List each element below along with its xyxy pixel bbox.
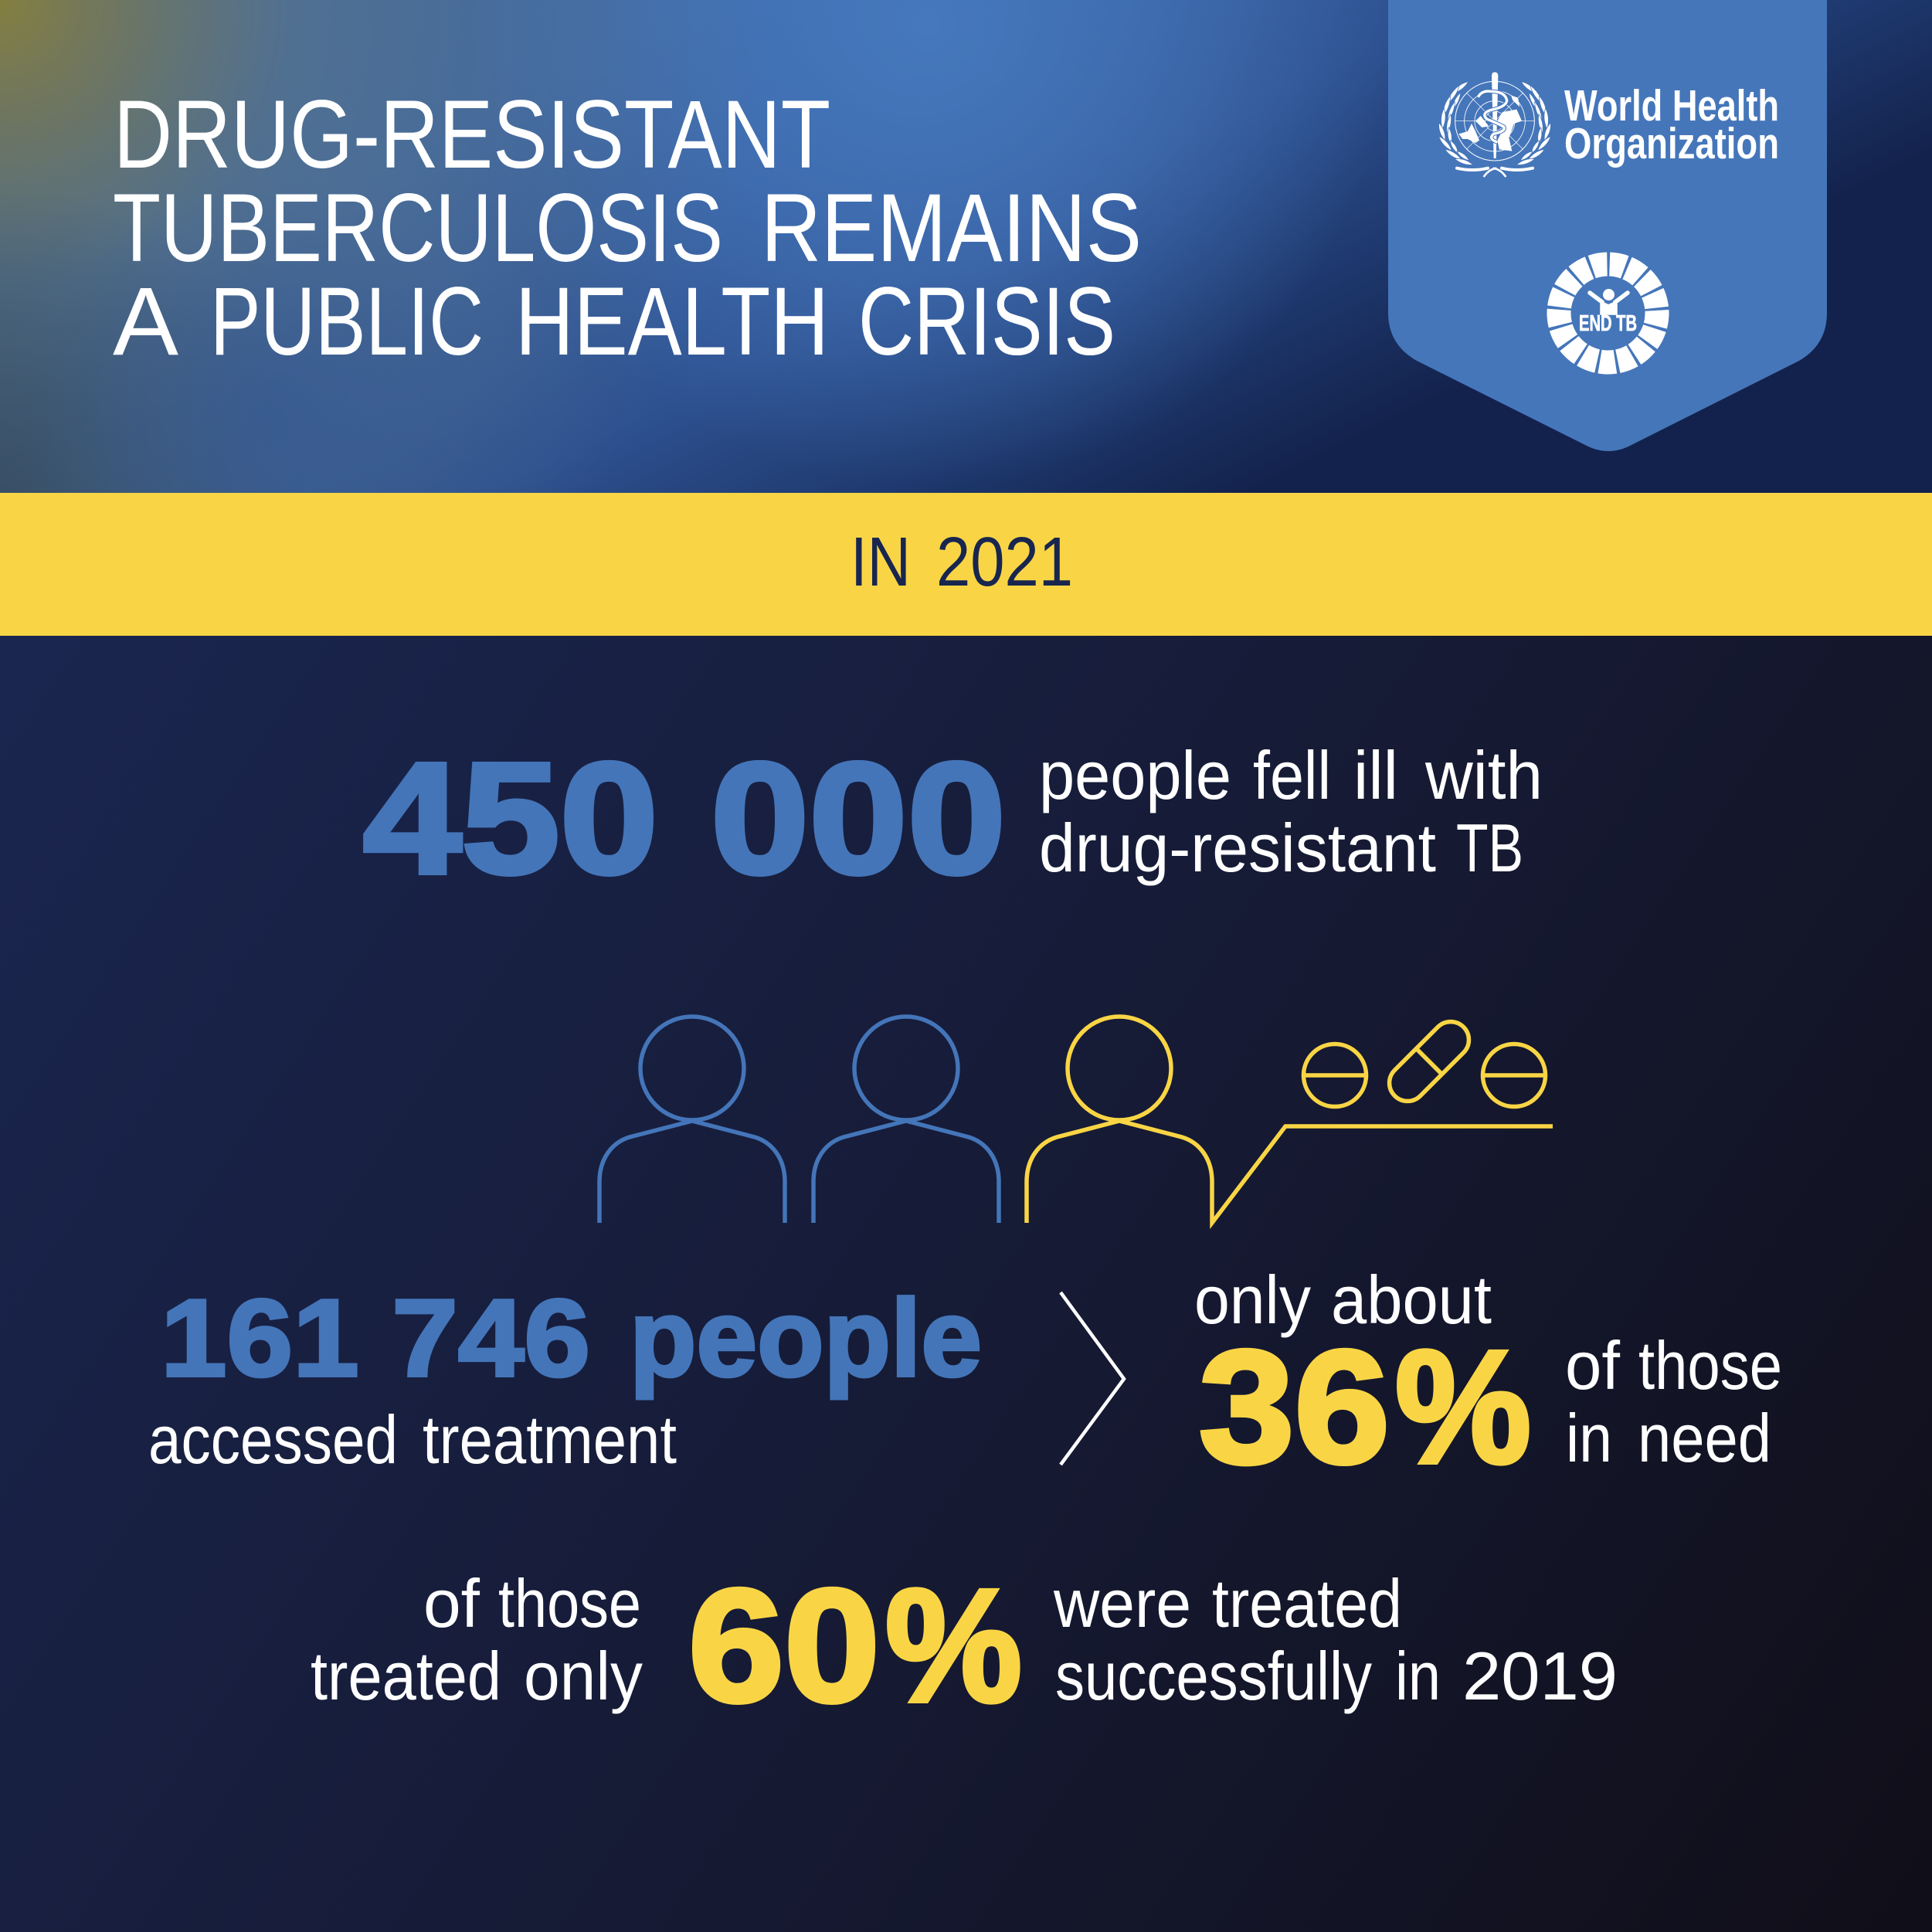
- icon: WHO emblem: [1439, 72, 1550, 177]
- stat: only about 36% of those in need: %: [1395, 1318, 1531, 1497]
- stat: 450 000 people fell ill: 450: [363, 730, 658, 907]
- main background: [0, 635, 1932, 1932]
- stat: of those treated only 60% were treated successfully in 2019: successfully: [1055, 1638, 1372, 1714]
- title: A: [113, 268, 179, 375]
- icon: End TB logo: [1557, 263, 1659, 364]
- stat: 161 746 people accessed treatment: [148, 1277, 982, 1478]
- stat: 450 000 people fell ill: 000: [711, 730, 1006, 907]
- header gradient background: [0, 0, 1932, 494]
- band heading: in 2021: 2021: [936, 524, 1073, 601]
- stat: of those treated only 60% were treated successfully in 2019: were: [1053, 1565, 1191, 1642]
- stat: 450 000 people fell ill: [363, 730, 1543, 907]
- stat: of those treated only 60% were treated successfully in 2019: 2019: [1462, 1638, 1618, 1714]
- icon: End TB logo: END TB: [1579, 311, 1637, 336]
- icon: blue person 1: [599, 1017, 785, 1223]
- stat: 450 000 people fell ill: drug-resistant: [1039, 810, 1436, 886]
- stat: 161 746 people accessed treatment: accessed: [148, 1401, 398, 1478]
- stat: 161 746 people accessed treatment: treatment: [423, 1401, 677, 1478]
- stat: of those treated only 60% were treated successfully in 2019: [311, 1557, 1618, 1736]
- stat: of those treated only 60% were treated successfully in 2019: %: [885, 1557, 1022, 1736]
- stat: of those treated only 60% were treated successfully in 2019: those: [498, 1565, 641, 1642]
- stat: of those treated only 60% were treated successfully in 2019: 60: [688, 1557, 880, 1736]
- stat: only about 36% of those in need: need: [1638, 1400, 1771, 1476]
- stat: only about 36% of those in need: only: [1194, 1261, 1311, 1338]
- title: DRUG-RESISTANT: [114, 81, 830, 188]
- title: HEALTH: [515, 268, 829, 375]
- stat: of those treated only 60% were treated successfully in 2019: treated: [311, 1638, 501, 1714]
- stat: only about 36% of those in need: of: [1565, 1327, 1621, 1404]
- stat: 450 000 people fell ill: with: [1424, 737, 1543, 813]
- stat: of those treated only 60% were treated successfully in 2019: only: [524, 1638, 643, 1714]
- title: REMAINS: [761, 175, 1142, 282]
- stat: only about 36% of those in need: [1194, 1261, 1782, 1497]
- stat: of those treated only 60% were treated successfully in 2019: in: [1395, 1638, 1441, 1714]
- stat: 450 000 people fell ill: fell: [1253, 737, 1331, 813]
- WHO wordmark: [1564, 81, 1779, 168]
- title: PUBLIC: [210, 268, 484, 375]
- logo shield panel: [1388, 0, 1827, 451]
- icon: yellow person with check mark: [1027, 1017, 1553, 1223]
- title: TUBERCULOSIS: [113, 175, 723, 282]
- stat: only about 36% of those in need: in: [1566, 1400, 1612, 1476]
- WHO wordmark: Organization: [1564, 119, 1779, 168]
- stat: only about 36% of those in need: 36: [1199, 1318, 1390, 1497]
- title: CRISIS: [858, 268, 1115, 375]
- icon: pills: [1304, 1014, 1545, 1109]
- icon: blue person 2: [813, 1017, 999, 1223]
- yellow band: [0, 493, 1932, 636]
- stat: only about 36% of those in need: about: [1331, 1261, 1492, 1338]
- stat: 161 746 people accessed treatment: people: [630, 1277, 982, 1400]
- arrow: chevron: [1061, 1292, 1124, 1465]
- stat: 450 000 people fell ill: ill: [1353, 737, 1398, 813]
- band heading: in 2021: IN: [851, 524, 911, 601]
- band heading: in 2021: [851, 524, 1073, 601]
- title: [113, 81, 1142, 375]
- stat: 450 000 people fell ill: TB: [1456, 810, 1523, 886]
- stat: of those treated only 60% were treated successfully in 2019: treated: [1212, 1565, 1402, 1642]
- WHO wordmark: World Health: [1564, 81, 1779, 131]
- stat: only about 36% of those in need: those: [1638, 1327, 1782, 1404]
- stat: 450 000 people fell ill: people: [1039, 737, 1231, 813]
- icon: row of people and medicine: [599, 1014, 1553, 1223]
- stat: 161 746 people accessed treatment: 161 746: [161, 1277, 590, 1400]
- stat: of those treated only 60% were treated successfully in 2019: of: [423, 1565, 480, 1642]
